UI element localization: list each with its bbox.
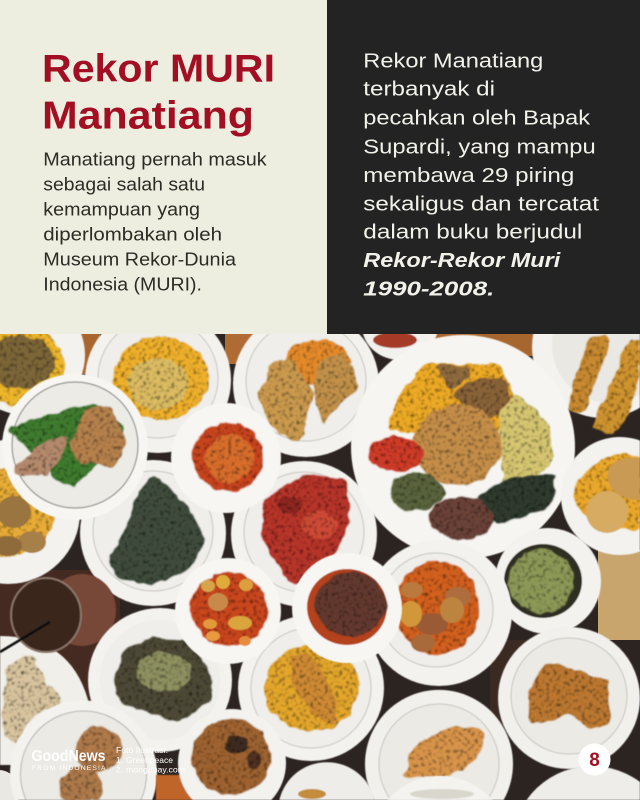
plate: bottom-right [526,766,640,800]
panel: cream intro [0,0,327,334]
title: Manatiang [42,94,254,137]
plate: red balado [231,461,377,607]
text block: record: pecahkan oleh Bapak [363,107,591,130]
photo credits: 1. [116,756,123,765]
title: Rekor MURI [42,48,275,91]
text block: record: dalam buku berjudul [363,221,582,244]
text block: intro [43,150,268,295]
text block: intro: Museum Rekor-Dunia [43,250,237,270]
bowl: bean curry [175,558,281,664]
plate: large mixed rice [351,335,575,559]
page number badge [578,744,610,776]
plate: left cream dish [0,636,88,765]
page number badge: 8 [589,750,600,771]
plate: top-left curry [0,295,85,415]
table background [0,334,640,800]
title [42,48,275,137]
plate: meat curry [366,540,512,686]
plate: green leaves [80,460,226,606]
bowl: red sambal [171,403,281,513]
plate: fried fish [498,627,640,769]
text block: intro: kemampuan yang [43,200,200,220]
text block: record [363,49,599,300]
plate: vegetables [88,608,232,752]
logo: GoodNews from Indonesia: GoodNews [32,748,106,765]
logo: GoodNews from Indonesia: FROM INDONESIA [32,765,106,772]
plate: fried food [233,311,379,457]
text block: intro: Manatiang pernah masuk [43,150,268,170]
plate: fish in yellow curry [238,615,384,761]
plate: far-left bottom sliver [0,770,20,800]
bowl: green chili [495,528,601,634]
bowl: egg curry [561,437,640,555]
text block: record: terbanyak di [363,78,495,101]
plate: left curry with meatballs [0,440,80,584]
plate: yellow curry [85,307,231,453]
plate: top-right skewers [532,276,640,434]
glass of drink [0,574,116,652]
food photo [0,276,640,800]
panel: dark record [327,0,640,334]
bowl: leaf and meat [2,374,148,520]
photo credits [116,746,185,774]
text block: record: Supardi, yang mampu [363,135,596,158]
text block: intro: diperlombakan oleh [43,225,222,245]
photo credits: Greenpeace [126,756,174,765]
text block: record: 1990-2008. [363,277,494,300]
photo credits: 2. [116,766,123,774]
text block: intro: sebagai salah satu [43,175,205,195]
bowl: dark rendang [292,553,402,663]
plate: bottom-centre fried [279,762,375,800]
plate: two round patties [10,700,157,800]
plate: top small red [362,292,438,360]
bowl: rice [387,776,493,800]
logo: GoodNews from Indonesia [32,748,106,772]
bowl: dark rendang sauce [156,709,286,800]
photo credits: Foto Ilustrasi: [116,746,168,755]
plate: fish steak [365,690,513,800]
text block: intro: Indonesia (MURI). [43,275,202,295]
photo credits: mongabay.com [126,766,185,774]
text block: record: Rekor-Rekor Muri [363,249,562,272]
text block: record: membawa 29 piring [363,164,574,187]
text block: record: sekaligus dan tercatat [363,192,599,215]
text block: record: Rekor Manatiang [363,49,543,72]
